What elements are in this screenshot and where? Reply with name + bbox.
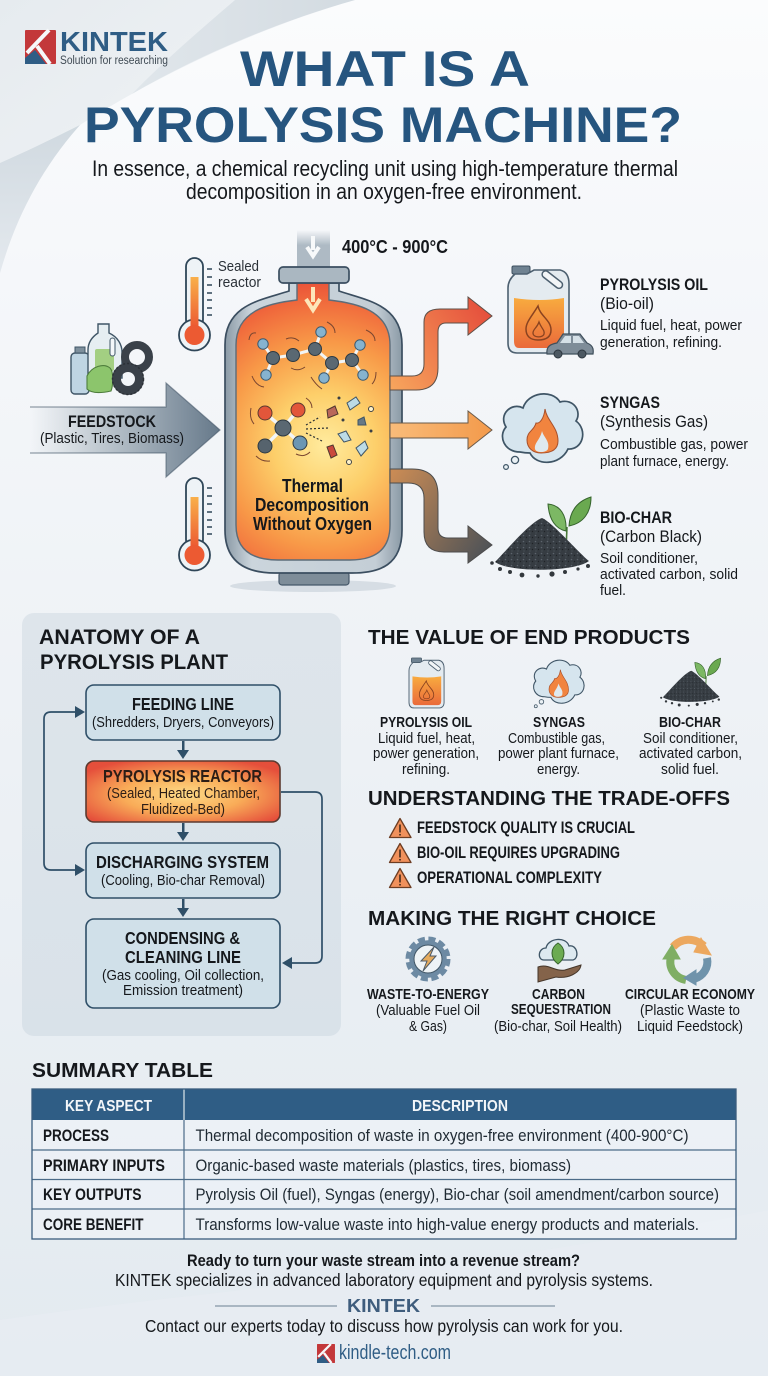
column: bio-char value: activated carbon, [639, 746, 742, 762]
text: bio-char: activated carbon, solid [600, 566, 738, 583]
column: pyrolysis oil value: power generation, [373, 746, 479, 762]
row: core benefit: CORE BENEFIT [43, 1215, 144, 1234]
heading: summary table: SUMMARY TABLE [32, 1060, 213, 1082]
panel heading [39, 626, 228, 674]
text: syngas [600, 393, 748, 470]
row: process: Thermal decomposition of waste in oxygen-free environment (400-900°C) [196, 1126, 688, 1145]
column: bio-char value: BIO-CHAR [659, 714, 721, 731]
column: waste-to-energy: & Gas) [409, 1019, 447, 1035]
icon: fuel jug with car [508, 266, 593, 358]
box: condensing and cleaning line: CONDENSING & [125, 928, 240, 948]
row: key outputs: KEY OUTPUTS [43, 1185, 142, 1204]
column: syngas value: SYNGAS [533, 714, 585, 731]
column: carbon sequestration: CARBON [532, 986, 585, 1003]
arrow: feedstock: (Plastic, Tires, Biomass) [40, 431, 184, 447]
box: discharging system: DISCHARGING SYSTEM [96, 852, 269, 872]
reactor label: Without Oxygen [253, 513, 372, 534]
column: bio-char value: solid fuel. [661, 762, 719, 778]
title: PYROLYSIS MACHINE? [84, 97, 682, 153]
box: feeding line: (Shredders, Dryers, Conveyors) [92, 715, 274, 731]
label: sealed reactor: reactor [218, 274, 261, 291]
text: pyrolysis oil: (Bio-oil) [600, 295, 654, 313]
subtitle: decomposition in an oxygen-free environment. [186, 179, 582, 204]
text: syngas: plant furnace, energy. [600, 453, 729, 470]
text: bio-char: fuel. [600, 582, 626, 599]
table header: KEY ASPECT [65, 1098, 152, 1115]
thermometer: bottom [179, 478, 212, 570]
molecule: breaking apart [250, 396, 374, 464]
footer brand: KINTEK divider: KINTEK [347, 1296, 420, 1316]
icon: small pile [660, 658, 721, 707]
column: pyrolysis oil value: Liquid fuel, heat, [378, 731, 475, 747]
text: pyrolysis oil [600, 275, 742, 351]
heading: the value of end products: THE VALUE OF END PRODUCTS [368, 626, 690, 649]
box: condensing and cleaning line [86, 919, 280, 1008]
icon: bio-char pile [490, 497, 591, 578]
row: process: PROCESS [43, 1126, 109, 1145]
title: WHAT IS A [240, 41, 530, 97]
label: sealed reactor: Sealed [218, 258, 259, 275]
list: trade-offs: OPERATIONAL COMPLEXITY [417, 869, 602, 887]
label: sealed reactor [218, 258, 261, 291]
arrows: flow down [177, 741, 189, 917]
table header [65, 1098, 508, 1115]
label: temperature range: 400°C - 900°C [342, 236, 448, 257]
list: trade-offs: BIO-OIL REQUIRES UPGRADING [417, 844, 620, 862]
column: circular economy: Liquid Feedstock) [637, 1019, 743, 1035]
call to action: Ready to turn your waste stream into a revenue stream? [187, 1252, 580, 1270]
text: pyrolysis oil: Liquid fuel, heat, power [600, 317, 742, 334]
box: pyrolysis reactor: Fluidized-Bed) [141, 802, 225, 818]
icon: small cloud [534, 660, 584, 708]
thermometer: top [179, 258, 212, 350]
call to action: KINTEK specializes in advanced laboratory equipment and pyrolysis systems. [115, 1270, 653, 1290]
box: pyrolysis reactor [86, 761, 280, 822]
text: syngas: (Synthesis Gas) [600, 413, 708, 431]
box: pyrolysis reactor: PYROLYSIS REACTOR [103, 766, 262, 786]
column: syngas value [498, 714, 619, 778]
reactor label [253, 475, 372, 534]
icon: hand with leaf and cloud [538, 939, 581, 982]
row: primary inputs: Organic-based waste materials (plastics, tires, biomass) [196, 1156, 571, 1175]
column: circular economy: (Plastic Waste to [640, 1003, 740, 1019]
arrow: to syngas [390, 411, 492, 449]
arrow: feedstock: FEEDSTOCK [68, 412, 157, 431]
icon: gear with bolt [408, 939, 448, 979]
arrow: to bio-char [390, 469, 492, 563]
website [317, 1342, 451, 1364]
column: bio-char value: Soil conditioner, [643, 731, 738, 747]
row: core benefit: Transforms low-value waste into high-value energy products and materials. [196, 1215, 699, 1234]
logo: KINTEK: Solution for researching [60, 55, 168, 67]
column: carbon sequestration: (Bio-char, Soil Health) [494, 1019, 622, 1035]
panel: anatomy of a pyrolysis plant [22, 613, 341, 1036]
column: syngas value: power plant furnace, [498, 746, 619, 762]
box: discharging system: (Cooling, Bio-char Removal) [101, 873, 265, 889]
title [84, 41, 682, 153]
reactor label: Decomposition [255, 494, 369, 515]
column: waste-to-energy [367, 986, 489, 1035]
website: kindle-tech.com [339, 1342, 451, 1364]
icon: syngas cloud [502, 394, 583, 469]
column: bio-char value [639, 714, 742, 778]
arrow: left loop [44, 706, 85, 876]
box: pyrolysis reactor: (Sealed, Heated Chamber, [107, 786, 260, 802]
list: trade-offs [390, 818, 635, 888]
box: condensing and cleaning line: CLEANING LINE [125, 947, 241, 967]
text: pyrolysis oil: generation, refining. [600, 334, 722, 351]
contact line: Contact our experts today to discuss how pyrolysis can work for you. [145, 1316, 623, 1336]
subtitle [92, 156, 678, 204]
call to action [115, 1252, 653, 1290]
column: carbon sequestration: SEQUESTRATION [511, 1001, 611, 1018]
list: trade-offs: FEEDSTOCK QUALITY IS CRUCIAL [417, 819, 635, 837]
column: pyrolysis oil value [373, 714, 479, 778]
panel heading: PYROLYSIS PLANT [40, 651, 228, 674]
heading: understanding the trade-offs: UNDERSTANDING THE TRADE-OFFS [368, 787, 730, 810]
box: discharging system [86, 843, 280, 898]
text: syngas: SYNGAS [600, 393, 660, 412]
box: condensing and cleaning line: (Gas cooling, Oil collection, [102, 968, 264, 984]
box: feeding line [86, 685, 280, 740]
text: bio-char: BIO-CHAR [600, 508, 672, 527]
text: pyrolysis oil: PYROLYSIS OIL [600, 275, 708, 294]
logo: KINTEK [25, 26, 168, 67]
reactor vessel [225, 230, 402, 592]
text: bio-char: Soil conditioner, [600, 550, 698, 567]
molecule: long chain [249, 322, 376, 389]
icon: circular arrows [663, 938, 711, 985]
column: waste-to-energy: WASTE-TO-ENERGY [367, 986, 489, 1003]
row: primary inputs [43, 1156, 571, 1175]
heading: making the right choice: MAKING THE RIGHT CHOICE [368, 907, 656, 930]
column: waste-to-energy: (Valuable Fuel Oil [376, 1003, 480, 1019]
column: syngas value: energy. [537, 762, 580, 778]
icon: feedstock materials [71, 324, 149, 394]
column: circular economy [625, 986, 755, 1035]
box: condensing and cleaning line: Emission treatment) [123, 983, 243, 999]
reactor label: Thermal [282, 475, 343, 496]
panel heading: ANATOMY OF A [39, 626, 200, 649]
arrow: right loop [281, 792, 322, 969]
column: syngas value: Combustible gas, [508, 731, 605, 747]
icon: small jug [409, 658, 444, 708]
subtitle: In essence, a chemical recycling unit using high-temperature thermal [92, 156, 678, 181]
row: process [43, 1126, 688, 1145]
summary table [32, 1089, 736, 1239]
text: bio-char: (Carbon Black) [600, 528, 702, 546]
arrow: to pyrolysis oil [390, 297, 492, 390]
table header: DESCRIPTION [412, 1098, 508, 1115]
logo: KINTEK: KINTEK [60, 26, 168, 57]
row: primary inputs: PRIMARY INPUTS [43, 1156, 165, 1175]
arrow: feedstock [30, 383, 220, 477]
column: pyrolysis oil value: refining. [402, 762, 450, 778]
text: syngas: Combustible gas, power [600, 436, 748, 453]
column: pyrolysis oil value: PYROLYSIS OIL [380, 714, 472, 731]
text: bio-char [600, 508, 738, 599]
column: carbon sequestration [494, 986, 622, 1035]
box: feeding line: FEEDING LINE [132, 694, 234, 714]
